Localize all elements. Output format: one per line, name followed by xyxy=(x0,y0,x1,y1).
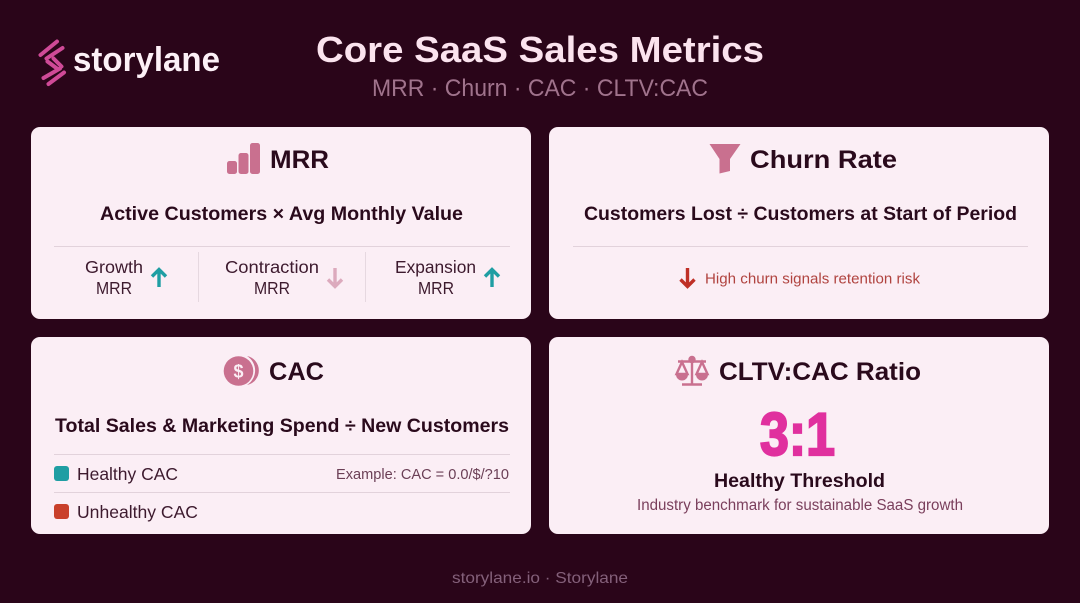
heading: CAC: CAC xyxy=(269,358,324,386)
arrow: up xyxy=(485,270,499,287)
wordmark: storylane xyxy=(73,41,220,79)
arrow: down xyxy=(680,268,694,286)
heading: Churn Rate: Churn Rate xyxy=(750,146,897,174)
heading: MRR: MRR xyxy=(270,146,329,174)
label: Healthy Threshold: Healthy Threshold xyxy=(714,471,885,492)
description: Industry benchmark for sustainable SaaS growth xyxy=(637,497,963,514)
legend: Healthy CAC: Healthy CAC xyxy=(77,464,178,484)
legend: Unhealthy CAC: Unhealthy CAC xyxy=(77,502,198,522)
icon: coin: $ xyxy=(233,362,244,382)
item: Contraction MRR xyxy=(225,257,342,298)
item: Expansion MRR: Expansion xyxy=(395,257,476,277)
item: Expansion MRR: MRR xyxy=(418,278,454,298)
example: Example: CAC = 0.0/$/?10 xyxy=(336,466,509,483)
icon: bar chart xyxy=(227,143,260,174)
item: Contraction MRR: Contraction xyxy=(225,257,319,277)
formula: Customers Lost ÷ Customers at Start of Period xyxy=(584,204,1017,225)
arrow: down xyxy=(328,268,342,286)
note: High churn signals retention risk xyxy=(705,270,921,288)
item: Expansion MRR xyxy=(395,257,499,298)
heading: CLTV:CAC Ratio: CLTV:CAC Ratio xyxy=(719,358,921,386)
panel: Churn Rate xyxy=(549,127,1049,319)
subtitle: MRR · Churn · CAC · CLTV:CAC xyxy=(372,75,708,102)
panel: CAC xyxy=(31,337,531,534)
icon: funnel xyxy=(710,144,740,174)
icon: coin xyxy=(224,356,259,386)
icon: scales xyxy=(676,357,708,384)
arrow: up xyxy=(152,270,166,287)
logo: storylane xyxy=(40,41,220,84)
icon: storylane mark xyxy=(40,42,64,84)
item: Contraction MRR: MRR xyxy=(254,278,290,298)
formula: Active Customers × Avg Monthly Value xyxy=(100,204,463,225)
item: Growth MRR xyxy=(85,257,166,298)
title: Core SaaS Sales Metrics xyxy=(316,29,764,70)
panel: CLTV:CAC Ratio xyxy=(549,337,1049,534)
formula: Total Sales & Marketing Spend ÷ New Customers xyxy=(55,416,509,437)
item: Growth MRR: MRR xyxy=(96,278,132,298)
footer: storylane.io · Storylane xyxy=(452,570,628,587)
item: Growth MRR: Growth xyxy=(85,257,143,277)
panel: MRR xyxy=(31,127,531,319)
big number: 3:1: 3:1 xyxy=(760,401,835,468)
